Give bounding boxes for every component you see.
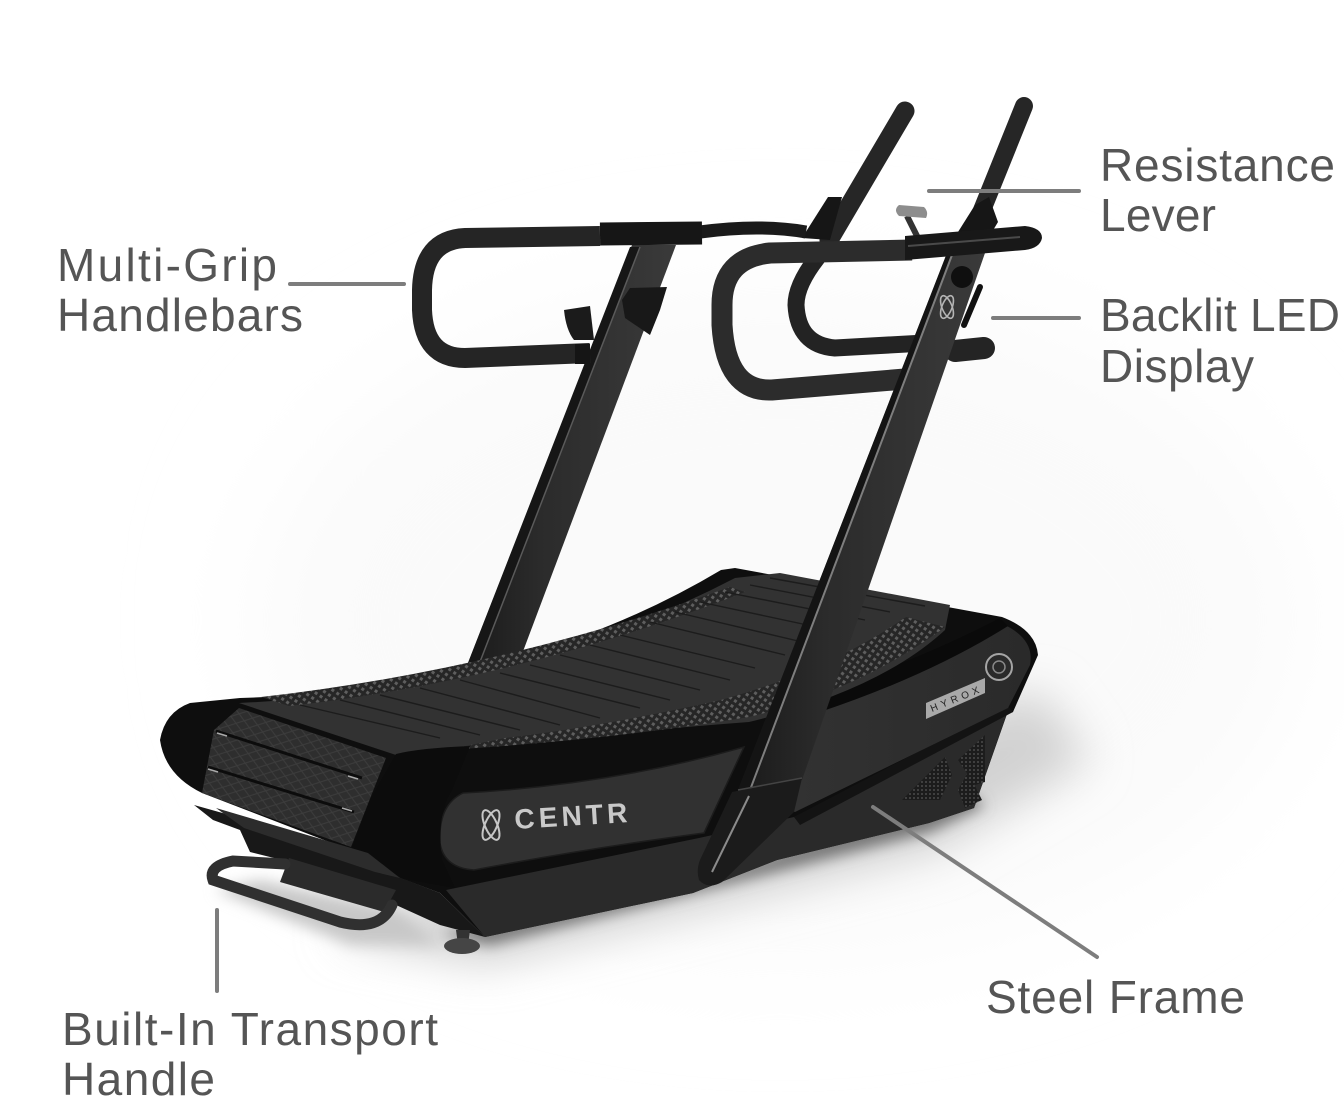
CENTR logo mark (479, 808, 503, 842)
lever (896, 205, 927, 238)
label: built-in transport handle (62, 910, 438, 1100)
leader line: display (993, 316, 1079, 320)
knob and post logo (938, 266, 973, 320)
HYROX badge: HYROX (929, 684, 985, 715)
treadmill base body (160, 568, 1038, 937)
HYROX badge (926, 654, 1012, 719)
rear upright grips (802, 106, 1024, 240)
text: multi-grip handlebars: Handlebars (57, 289, 303, 341)
right post (738, 253, 985, 790)
leader line: handlebars (290, 282, 404, 286)
CENTR wordmark: CENTR (513, 797, 628, 835)
leader line: lever (929, 189, 1079, 193)
front end cap (352, 746, 470, 888)
treadmill (160, 106, 1042, 954)
CENTR side panel (440, 747, 744, 870)
text: resistance lever: Resistance (1100, 139, 1335, 191)
text: resistance lever: Lever (1100, 189, 1216, 241)
text: backlit LED display: Display (1100, 340, 1254, 392)
deck slats (300, 578, 925, 738)
side plate (760, 625, 1031, 812)
text: steel frame: Steel Frame (986, 971, 1245, 1023)
text: multi-grip handlebars: Multi-Grip (57, 239, 277, 291)
text: built-in transport handle: Built-In Transport (62, 1003, 438, 1055)
black side stripe (815, 618, 1008, 712)
left post clips (564, 287, 667, 340)
rear inner handlebar loop (796, 258, 984, 351)
rear textured band (261, 587, 745, 706)
left handlebar loop (422, 233, 702, 364)
front textured band (446, 617, 945, 750)
center crossbar (700, 228, 806, 232)
label: resistance lever (929, 139, 1335, 241)
lower frame (446, 705, 1013, 937)
adjustable foot (444, 930, 480, 954)
left post (466, 245, 676, 668)
leader line: transport handle (215, 910, 219, 991)
label: steel frame (873, 807, 1245, 1023)
transport handle (212, 858, 396, 925)
text: backlit LED display: Backlit LED (1100, 289, 1340, 341)
front rollers (202, 708, 386, 847)
leader line: frame (873, 807, 1097, 957)
side vents (902, 735, 985, 808)
lower front housing (194, 805, 485, 937)
right handlebar sleeve (905, 226, 1042, 260)
right handlebar loop (722, 250, 912, 390)
label: backlit LED display (993, 289, 1340, 392)
running deck (239, 573, 950, 755)
floor shadow (215, 690, 1090, 965)
label: multi-grip handlebars (57, 239, 404, 341)
lower post sleeve (698, 778, 802, 886)
